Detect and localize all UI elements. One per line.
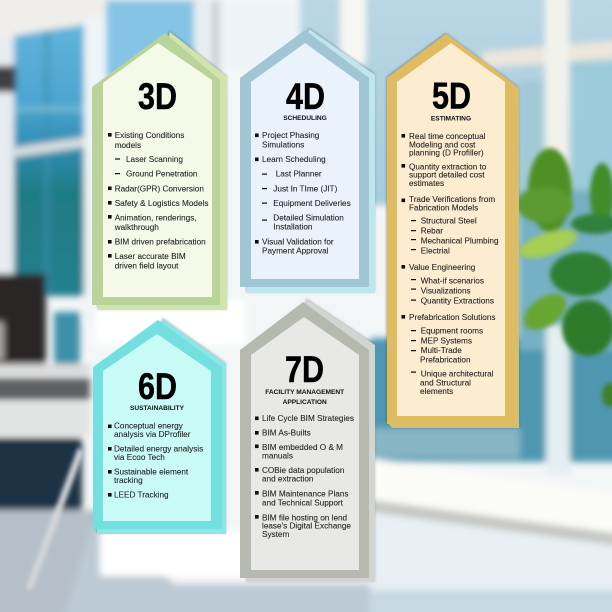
list: 7D items: BIM file hosting on lend <box>262 513 348 522</box>
subheading: facility management application <box>265 389 344 406</box>
heading: 3D: 3D <box>138 76 177 117</box>
list: 5D items: Structural Steel <box>421 217 477 226</box>
list: 3D items: models <box>115 141 141 150</box>
list: 6D items: Detailed energy analysis <box>114 445 203 454</box>
list: 4D items: Equipment Deliveries <box>273 199 351 208</box>
list: 7D items: System <box>262 530 289 539</box>
list: 5D items: Quantity Extractions <box>421 296 494 305</box>
list: 5D items: Prefabrication Solutions <box>409 313 495 322</box>
list: 5D items <box>402 132 499 396</box>
list: 3D items: Safety & Logistics Models <box>115 199 208 208</box>
list: 5D items: Modeling and cost <box>409 140 476 149</box>
list: 5D items: and Structural <box>420 378 471 387</box>
list: 4D items: Learn Scheduling <box>262 155 326 164</box>
heading: 7D: 7D <box>285 349 324 390</box>
subheading: scheduling: SCHEDULING <box>283 115 327 122</box>
list: 7D items <box>255 414 354 539</box>
list: 5D items: Equpment rooms <box>421 326 483 335</box>
list: 4D items: Just In TIme (JIT) <box>273 184 338 193</box>
list: 7D items: BIM embedded O & M <box>262 443 343 452</box>
list: 3D items: Radar(GPR) Conversion <box>115 184 204 193</box>
list: 3D items <box>108 131 208 270</box>
list: 5D items: elements <box>420 387 453 396</box>
list: 6D items: Sustainable element <box>114 468 189 477</box>
list: 5D items: Visualizations <box>421 286 471 295</box>
list: 7D items: BIM As-Builts <box>262 428 311 437</box>
list: 3D items: walkthrough <box>114 223 159 232</box>
list: 5D items: Quantity extraction to <box>409 162 487 171</box>
panel: 6D <box>93 319 226 534</box>
list: 7D items: Life Cycle BIM Strategies <box>262 414 354 423</box>
list: 6D items: LEED Tracking <box>114 491 169 500</box>
subheading: estimating: ESTIMATING <box>431 116 471 123</box>
list: 7D items: COBie data population <box>262 466 345 475</box>
list: 5D items: Multi-Trade <box>421 346 462 355</box>
list: 4D items: Last Planner <box>276 170 322 179</box>
list: 5D items: What-if scenarios <box>421 276 484 285</box>
list: 5D items: Rebar <box>421 226 443 235</box>
heading: 6D: 6D <box>138 366 177 407</box>
list: 3D items: Laser Scanning <box>126 155 183 164</box>
list: 4D items: Simulations <box>262 140 304 149</box>
list: 3D items: Ground Penetration <box>126 170 198 179</box>
list: 5D items: Trade Verifications from <box>409 195 495 204</box>
list: 5D items: MEP Systems <box>421 336 472 345</box>
list: 3D items: BIM driven prefabrication <box>115 238 206 247</box>
panel: 5D <box>387 34 519 428</box>
chair leg <box>26 448 84 590</box>
list: 5D items: Unique architectural <box>421 369 494 378</box>
panel: 4D <box>240 29 375 293</box>
list: 6D items: Conceptual energy <box>114 422 184 431</box>
subheading: facility management application: APPLICATION <box>283 399 327 406</box>
list: 4D items: Project Phasing <box>262 131 320 140</box>
list: 5D items: Fabrication Models <box>409 203 478 212</box>
list: 5D items: Prefabrication <box>420 355 471 364</box>
list: 5D items: Electrial <box>421 246 450 255</box>
list: 7D items: and extraction <box>262 474 314 483</box>
list: 4D items: Detailed Simulation <box>273 213 344 222</box>
list: 3D items: driven field layout <box>115 261 179 270</box>
list: 7D items: manuals <box>262 451 293 460</box>
list: 7D items: lease's Digital Exchange <box>262 522 351 531</box>
list: 5D items: Value Engineering <box>409 263 476 272</box>
list: 7D items: and Technical Support <box>262 499 344 508</box>
panel: 3D <box>92 32 227 310</box>
subheading: facility management application: FACILITY MANAGEMENT <box>265 389 344 396</box>
list: 6D items <box>108 422 203 500</box>
list: 4D items: Visual Validation for <box>262 237 334 246</box>
list: 5D items: Real time conceptual <box>409 132 486 141</box>
list: 5D items: support detailed cost <box>409 171 485 180</box>
list: 4D items <box>255 131 351 256</box>
list: 7D items: BIM Maintenance Plans <box>262 489 348 498</box>
list: 3D items: Existing Conditions <box>115 131 184 140</box>
panel: 7D <box>240 300 375 582</box>
list: 3D items: Laser accurate BIM <box>115 252 186 261</box>
list: 4D items: Payment Approval <box>262 247 329 256</box>
list: 4D items: Installation <box>273 223 313 232</box>
subheading: sustainability: SUSTAINABILITY <box>130 405 185 412</box>
list: 6D items: tracking <box>114 476 143 485</box>
list: 6D items: analysis via DProfiler <box>114 430 191 439</box>
list: 5D items: Mechanical Plumbing <box>421 236 499 245</box>
list: 5D items: planning (D Profiller) <box>409 149 484 158</box>
list: 5D items: estimates <box>409 179 444 188</box>
list: 6D items: via Ecoo Tech <box>114 453 165 462</box>
heading: 4D: 4D <box>286 76 325 117</box>
heading: 5D: 5D <box>432 76 471 116</box>
list: 3D items: Animation, renderings, <box>115 214 197 223</box>
